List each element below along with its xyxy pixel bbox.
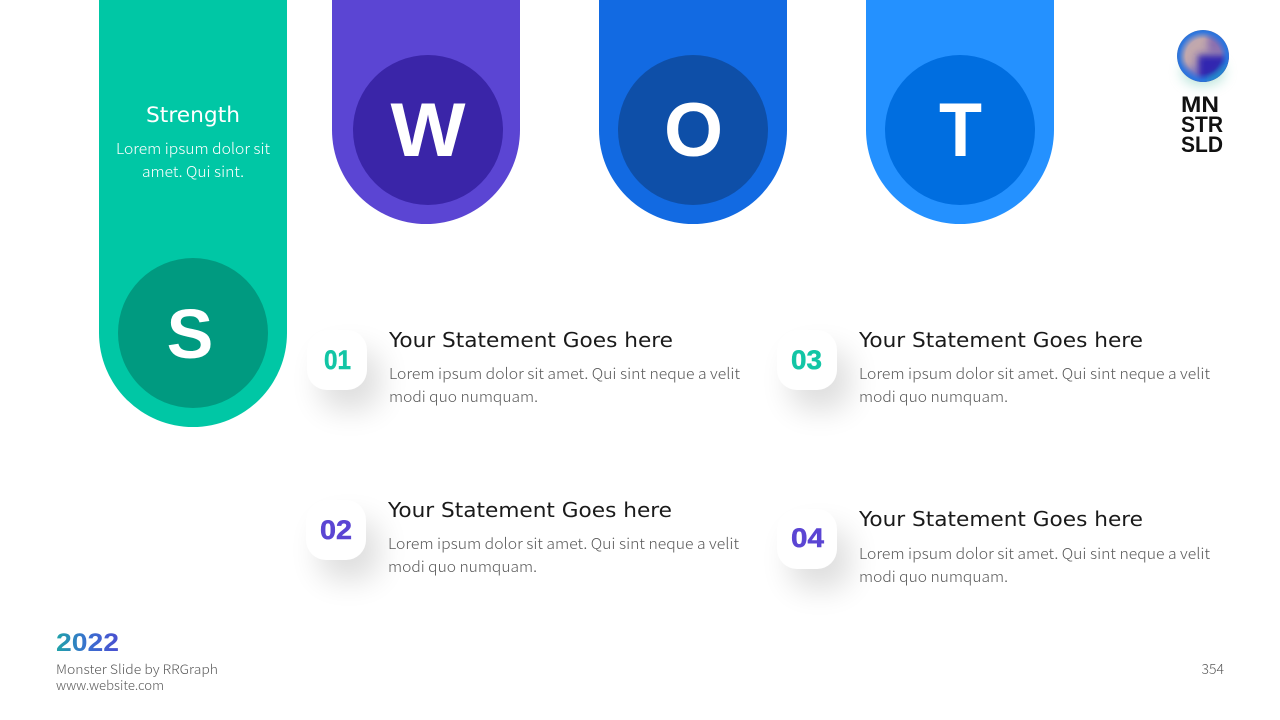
logo text: STR (1181, 112, 1223, 137)
panel: W pill (332, 0, 520, 224)
text 03 (859, 363, 1211, 407)
text 03: Lorem ipsum dolor sit amet. Qui sint neque a velit (859, 363, 1211, 384)
statement 03 (777, 328, 1211, 410)
panel: O pill (599, 0, 787, 224)
text 01: modi quo numquam. (389, 386, 538, 407)
panel: T pill (866, 0, 1054, 224)
text 01 (389, 363, 741, 407)
statement 02 (306, 498, 740, 580)
icon: S circle: S (167, 295, 213, 373)
logo text: MN (1181, 92, 1219, 117)
footer credit: Monster Slide by RRGraph (56, 659, 218, 678)
footer year: 2022 (56, 629, 119, 657)
footer credit: www.website.com (56, 675, 164, 694)
badge 02 (306, 500, 366, 560)
logo (1176, 30, 1230, 152)
icon: T circle (885, 55, 1035, 205)
badge 03: 03 (791, 345, 822, 375)
badge 01 (307, 330, 367, 390)
text: Strength description: amet. Qui sint. (142, 161, 244, 182)
heading 03: Your Statement Goes here (858, 328, 1143, 352)
page number: 354 (1202, 659, 1224, 679)
icon: O circle: O (664, 88, 723, 173)
heading 02: Your Statement Goes here (387, 498, 672, 522)
icon: S circle (118, 258, 268, 408)
logo sphere (1177, 30, 1229, 82)
heading 04: Your Statement Goes here (858, 507, 1143, 531)
text 03: modi quo numquam. (859, 386, 1008, 407)
statement 04 (777, 507, 1211, 589)
badge 01: 01 (324, 345, 351, 375)
badge 04 (777, 509, 837, 569)
statement 01 (307, 328, 741, 410)
footer credit (56, 659, 218, 694)
text 04 (859, 543, 1211, 587)
badge 02: 02 (320, 515, 352, 545)
text 04: modi quo numquam. (859, 566, 1008, 587)
logo text: SLD (1181, 132, 1223, 157)
text 04: Lorem ipsum dolor sit amet. Qui sint neque a velit (859, 543, 1211, 564)
text 02: modi quo numquam. (388, 556, 537, 577)
icon: O circle (618, 55, 768, 205)
panel: Strength pill (99, 0, 287, 427)
text 01: Lorem ipsum dolor sit amet. Qui sint neque a velit (389, 363, 741, 384)
badge 03 (777, 330, 837, 390)
logo text (1181, 92, 1223, 157)
text: Strength description: Lorem ipsum dolor sit (116, 138, 271, 159)
icon: T circle: T (939, 88, 982, 173)
icon: W circle: W (390, 88, 466, 173)
icon: W circle (353, 55, 503, 205)
badge 04: 04 (791, 523, 824, 553)
heading 01: Your Statement Goes here (388, 328, 673, 352)
text 02: Lorem ipsum dolor sit amet. Qui sint neque a velit (388, 533, 740, 554)
text: Strength description (116, 138, 271, 182)
heading: Strength: Strength (146, 103, 240, 127)
text 02 (388, 533, 740, 577)
